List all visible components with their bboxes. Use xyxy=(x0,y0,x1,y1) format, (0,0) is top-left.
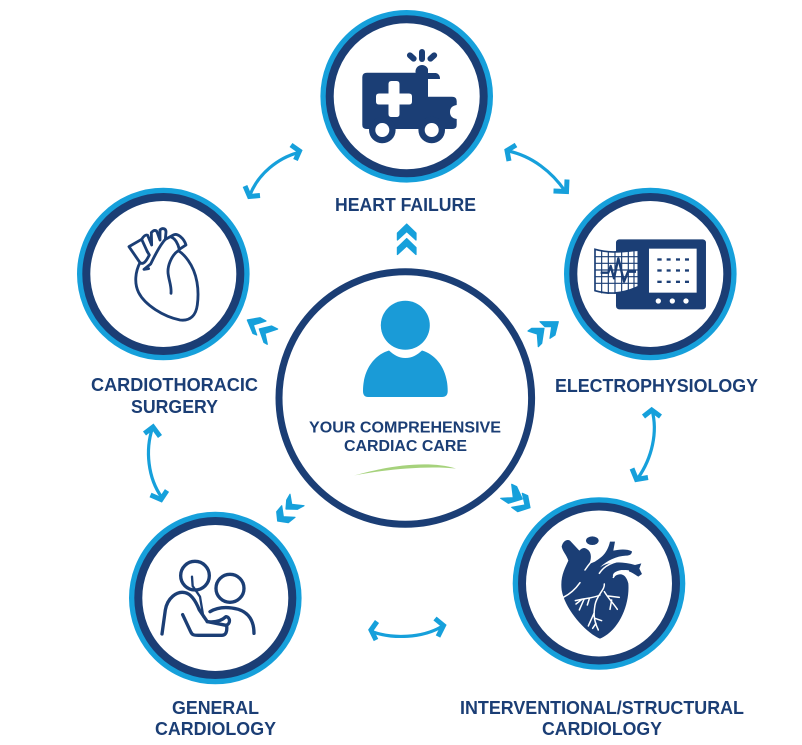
center circle: your comprehensive cardiac care xyxy=(279,272,532,524)
panel: electrophysiology xyxy=(555,191,758,396)
green swoosh xyxy=(354,464,456,476)
arrow: general to interventional xyxy=(371,618,444,640)
center heading: CARDIAC CARE xyxy=(344,438,467,455)
icon: ECG monitor xyxy=(595,239,706,309)
arrow: heart failure to cardiothoracic surgery xyxy=(245,145,300,196)
panel: heart failure xyxy=(323,13,490,215)
label: interventional/structural cardiology: INTERVENTIONAL/STRUCTURAL xyxy=(460,698,744,718)
label: interventional/structural cardiology: CARDIOLOGY xyxy=(542,719,662,739)
label: electrophysiology: ELECTROPHYSIOLOGY xyxy=(555,376,758,396)
label: cardiothoracic surgery: SURGERY xyxy=(131,397,218,417)
icon: doctor with stethoscope and patient xyxy=(162,561,254,635)
arrow: electrophysiology to interventional xyxy=(632,410,660,480)
label: interventional/structural cardiology xyxy=(460,698,744,739)
icon: heart outline xyxy=(129,229,198,320)
panel: general cardiology xyxy=(132,515,299,739)
arrow: cardiothoracic to general xyxy=(144,427,167,500)
chevrons: up to heart failure xyxy=(397,224,416,254)
chevrons: to electrophysiology xyxy=(528,322,558,347)
label: cardiothoracic surgery xyxy=(91,375,258,417)
chevrons: to interventional cardiology xyxy=(501,484,530,512)
chevrons: to cardiothoracic surgery xyxy=(247,318,278,344)
label: cardiothoracic surgery: CARDIOTHORACIC xyxy=(91,375,258,395)
center heading: YOUR COMPREHENSIVE xyxy=(309,419,501,436)
label: general cardiology: GENERAL xyxy=(172,698,259,718)
chevrons: to general cardiology xyxy=(277,494,304,523)
center heading xyxy=(309,419,501,455)
panel: cardiothoracic surgery xyxy=(80,191,258,417)
label: heart failure: HEART FAILURE xyxy=(335,195,476,215)
arrow: heart failure to electrophysiology xyxy=(507,145,567,192)
icon: person xyxy=(363,301,448,397)
icon: ambulance xyxy=(362,49,457,143)
label: general cardiology: CARDIOLOGY xyxy=(155,719,276,739)
panel: interventional/structural cardiology xyxy=(460,500,744,739)
label: general cardiology xyxy=(155,698,276,739)
icon: anatomical heart xyxy=(561,536,642,639)
